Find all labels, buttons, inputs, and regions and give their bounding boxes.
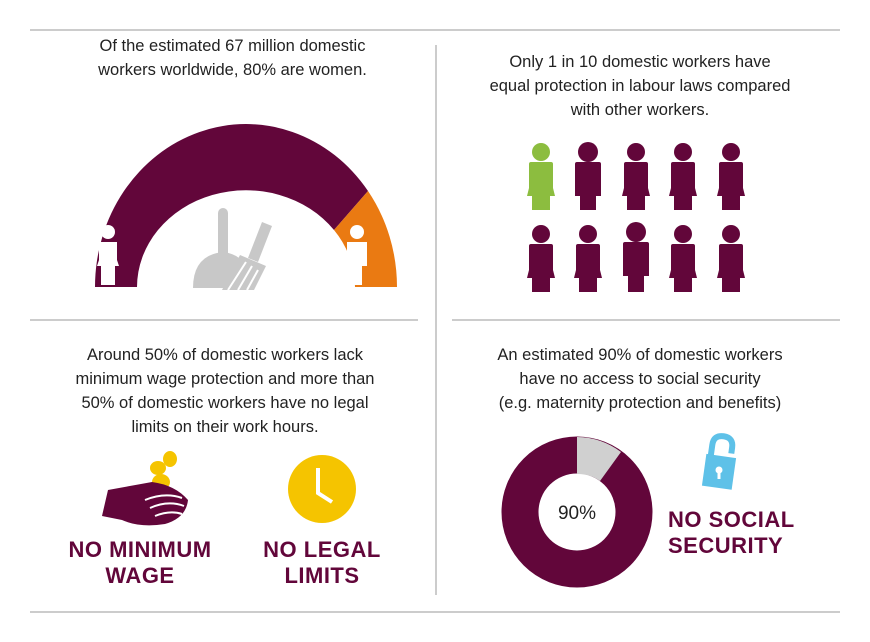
value: 90%: [558, 503, 596, 524]
label: no social security: NO SOCIAL: [668, 507, 795, 532]
text: 50% minimum wage: Around 50% of domestic workers lack: [87, 346, 363, 364]
text: 90% social security: [497, 346, 783, 412]
label: no social security: [668, 507, 795, 558]
icon: coins: [150, 451, 177, 490]
icon: dustpan and brush: [193, 208, 272, 290]
icon: clock: [288, 455, 356, 523]
icon: hand: [102, 482, 188, 525]
label: no minimum wage: [68, 537, 212, 588]
text: 90% social security: An estimated 90% of domestic workers: [497, 346, 783, 364]
text: 67 million: [98, 37, 367, 79]
label: no minimum wage: WAGE: [105, 563, 175, 588]
text: 90% social security: have no access to social security: [519, 370, 761, 388]
text: 1 in 10: Only 1 in 10 domestic workers have: [509, 53, 771, 71]
text: 90% social security: (e.g. maternity protection and benefits): [499, 394, 781, 412]
icons: hand and clock: [102, 451, 356, 526]
text: 67 million: workers worldwide, 80% are women.: [98, 61, 367, 79]
label: no legal limits: [263, 537, 381, 588]
text: 1 in 10: with other workers.: [571, 101, 709, 119]
arc: men 20%: [334, 191, 397, 287]
icon: padlock: [702, 433, 736, 490]
chart: semicircle women vs men: [95, 124, 397, 290]
text: 50% minimum wage: [76, 346, 374, 436]
text: 1 in 10: equal protection in labour laws compared: [490, 77, 790, 95]
label: no minimum wage: NO MINIMUM: [68, 537, 212, 562]
text: 50% minimum wage: limits on their work hours.: [131, 418, 319, 436]
label: no legal limits: LIMITS: [284, 563, 360, 588]
arc: women 80%: [95, 124, 368, 287]
text: 50% minimum wage: minimum wage protection and more than: [76, 370, 374, 388]
pictogram: 10 workers: [527, 142, 745, 292]
chart: donut 90%: [502, 436, 652, 588]
text: 67 million: Of the estimated 67 million domestic: [100, 37, 365, 55]
text: 1 in 10: [490, 53, 790, 119]
label: no legal limits: NO LEGAL: [263, 537, 381, 562]
text: 50% minimum wage: 50% of domestic workers have no legal: [81, 394, 369, 412]
icon: woman: [97, 225, 119, 285]
icon: man: [347, 225, 367, 285]
label: no social security: SECURITY: [668, 533, 783, 558]
